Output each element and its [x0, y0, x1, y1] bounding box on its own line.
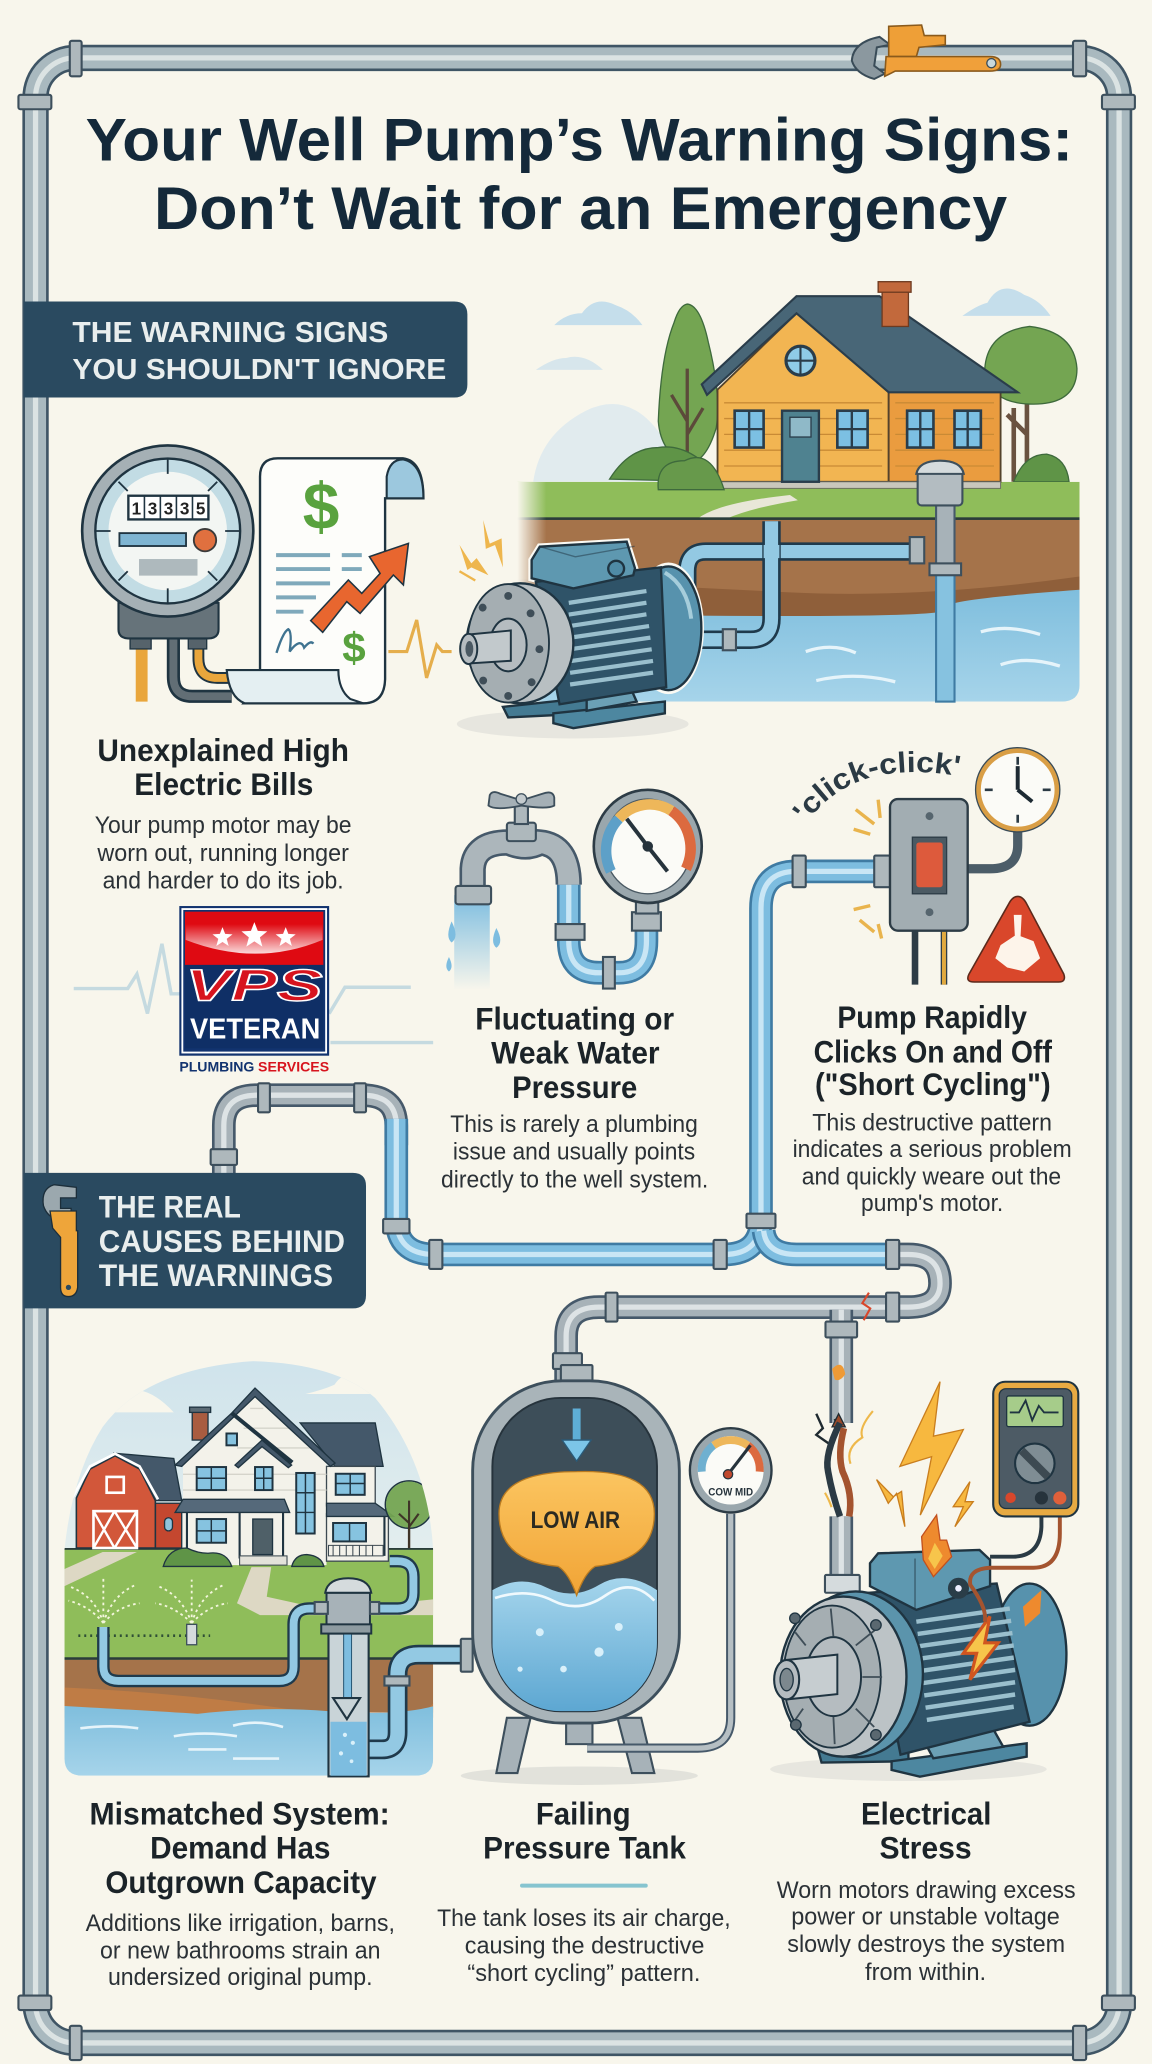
heading: weak water pressure: Fluctuating or [475, 1000, 674, 1036]
banner: warning signs: THE WARNING SIGNS [72, 317, 388, 349]
icon: burnt wire on pipe [816, 1365, 873, 1516]
heading: failing pressure tank [483, 1795, 686, 1866]
title [86, 106, 1073, 242]
bubble: low air: LOW AIR [531, 1508, 620, 1534]
text: water pressure description: issue and usually points [453, 1139, 695, 1166]
heading: weak water pressure [475, 1000, 674, 1105]
text: mismatched system description: Additions like irrigation, barns, [86, 1910, 395, 1937]
well pipes underground [687, 521, 924, 650]
banner: real causes: CAUSES BEHIND [99, 1223, 345, 1259]
title: Don’t Wait for an Emergency [154, 174, 1008, 242]
icon: electric bill with rising arrow: $ [303, 469, 339, 543]
well head [916, 461, 964, 702]
banner: real causes: THE WARNINGS [99, 1257, 333, 1293]
heading: short cycling: Clicks On and Off [814, 1033, 1052, 1069]
icon: pulse line by bill [388, 620, 452, 678]
text: mismatched system description: or new bathrooms strain an [100, 1938, 380, 1965]
heading: mismatched system: Outgrown Capacity [105, 1864, 377, 1900]
heading: mismatched system [90, 1795, 390, 1900]
heading: electric bills: Electric Bills [134, 766, 313, 802]
icon: burning motor [770, 1515, 1066, 1781]
heading: electric bills: Unexplained High [97, 732, 349, 768]
icon: electric meter [82, 445, 253, 702]
icon: faucet and pressure gauge [446, 790, 702, 990]
text: mismatched system description [86, 1910, 395, 1991]
tank gauge: COW MID [708, 1486, 753, 1498]
grass, soil and water ground layers [517, 482, 1080, 702]
logo: Veteran Plumbing Services [179, 906, 329, 1075]
barn [70, 1453, 182, 1548]
text: short cycling description: This destructive pattern [812, 1110, 1052, 1137]
sprinklers [68, 1577, 228, 1623]
text: mismatched system description: undersized original pump. [108, 1964, 373, 1991]
icon: electric bill with rising arrow: $ [342, 624, 366, 671]
bush [658, 458, 724, 490]
banner: real causes: THE REAL [99, 1189, 241, 1225]
icon: pipe wrench on frame [852, 25, 1001, 79]
text: pressure tank description: The tank loses its air charge, [437, 1905, 731, 1932]
heading: failing pressure tank: Failing [536, 1795, 631, 1831]
text: electric bills description [95, 812, 352, 895]
icon: warning triangle [968, 896, 1064, 982]
banner: warning signs: YOU SHOULDN'T IGNORE [72, 354, 446, 386]
heading: failing pressure tank: Pressure Tank [483, 1830, 686, 1866]
crack mark on pipe [862, 1293, 870, 1320]
tank gauge [690, 1428, 772, 1512]
icon: electric bill with rising arrow [227, 458, 423, 703]
icon: spark bolts [459, 520, 503, 580]
pipe: grey riser to blue loop [224, 1095, 396, 1175]
heading: electrical stress: Electrical [861, 1795, 991, 1831]
background hill and clouds [533, 289, 1051, 482]
heading: short cycling: ("Short Cycling") [815, 1066, 1051, 1102]
text: electric bills description: and harder to do its job. [103, 868, 344, 895]
tank legs [496, 1718, 654, 1773]
sky ground and house [65, 1356, 434, 1776]
heading: electrical stress [861, 1795, 991, 1866]
text: short cycling description: indicates a serious problem [793, 1136, 1072, 1163]
heading: mismatched system: Mismatched System: [90, 1795, 390, 1831]
text: pressure tank description: “short cycling” pattern. [467, 1960, 700, 1987]
text: electrical stress description: power or unstable voltage [791, 1903, 1060, 1930]
banner: warning signs [24, 301, 467, 398]
heading: mismatched system: Demand Has [150, 1830, 330, 1866]
text: short cycling description [793, 1110, 1072, 1217]
farmhouse [163, 1388, 394, 1566]
icon: pressure switch box [854, 799, 968, 985]
icon: clock gauge [968, 748, 1060, 869]
text: electric bills description: worn out, running longer [96, 840, 349, 867]
text: electrical stress description [777, 1877, 1076, 1986]
heading: electric bills [97, 732, 349, 802]
text: pressure tank description [437, 1905, 731, 1987]
text: electrical stress description: Worn motors drawing excess [777, 1877, 1076, 1904]
pipe couplers [211, 856, 899, 1593]
pipe: blue main line and riser to switch [396, 871, 898, 1254]
text: electric bills description: Your pump motor may be [95, 812, 352, 839]
text: water pressure description [441, 1111, 708, 1193]
banner: real causes [24, 1173, 366, 1308]
bubble: low air [499, 1472, 654, 1595]
icon: wrench [43, 1185, 78, 1297]
pipe: grey run to tank and motor [566, 1254, 940, 1580]
heading: weak water pressure: Weak Water [491, 1035, 660, 1071]
icon: motor with vibration sparks [457, 520, 704, 738]
icon: motor flames [922, 1515, 1041, 1680]
text: short cycling description: pump's motor. [861, 1190, 1003, 1217]
well with down arrow [315, 1578, 379, 1776]
logo: Veteran Plumbing Services: VETERAN [190, 1014, 320, 1046]
panel: house and well scene [517, 282, 1080, 702]
icon: electric meter: 13335 [132, 500, 206, 519]
text: pressure tank description: causing the destructive [465, 1932, 704, 1959]
text: click-click: 'click-click' [792, 751, 960, 814]
icon: multimeter [970, 1382, 1078, 1622]
text: short cycling description: and quickly weare out the [802, 1164, 1061, 1191]
logo: Veteran Plumbing Services: SERVICES [258, 1059, 329, 1075]
text: water pressure description: This is rarely a plumbing [450, 1111, 698, 1138]
text: electrical stress description: from within. [865, 1959, 986, 1986]
trees [610, 304, 1077, 482]
icon: lightning bolts [877, 1382, 973, 1527]
logo: Veteran Plumbing Services: VPS [186, 960, 323, 1010]
tree [385, 1481, 433, 1548]
logo: Veteran Plumbing Services: PLUMBING [179, 1059, 254, 1075]
heading: short cycling: Pump Rapidly [837, 999, 1027, 1035]
heading: electrical stress: Stress [879, 1830, 972, 1866]
icon: pressure tank [461, 1365, 772, 1785]
text: electrical stress description: slowly destroys the system [787, 1931, 1065, 1958]
irrigation pipes [103, 1561, 473, 1749]
text: water pressure description: directly to the well system. [441, 1166, 708, 1193]
house [702, 282, 1018, 488]
heading: short cycling [814, 999, 1052, 1102]
decorative pulse behind logo [74, 944, 433, 1043]
panel: farm and irrigation scene [65, 1356, 473, 1776]
title: Your Well Pump’s Warning Signs: [86, 106, 1073, 174]
pipes: central network [211, 856, 940, 1593]
heading: weak water pressure: Pressure [512, 1069, 637, 1105]
